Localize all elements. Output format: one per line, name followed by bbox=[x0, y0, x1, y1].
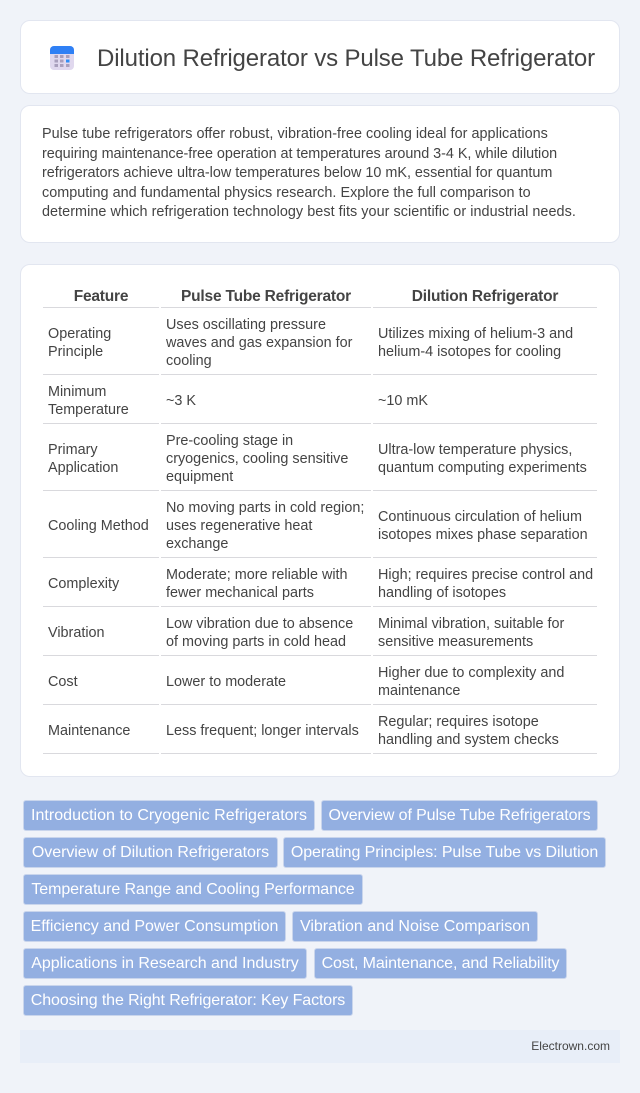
row: vibration: Low vibration due to absence bbox=[166, 616, 353, 632]
row: cooling method bbox=[48, 500, 588, 552]
row: minimum temperature bbox=[48, 384, 428, 418]
topic tags: Choosing the Right Refrigerator: Key Factors bbox=[31, 992, 345, 1009]
row: cost: maintenance bbox=[378, 683, 460, 699]
topic tags: Overview of Pulse Tube Refrigerators bbox=[329, 807, 590, 824]
row: complexity: handling of isotopes bbox=[378, 585, 506, 601]
topic tags: Applications in Research and Industry bbox=[31, 955, 299, 972]
row: primary application bbox=[48, 433, 587, 485]
topic tags: Cost, Maintenance, and Reliability bbox=[322, 955, 559, 972]
row: maintenance bbox=[48, 714, 559, 748]
row: maintenance: handling and system checks bbox=[378, 732, 559, 748]
row: operating principle: helium-4 isotopes for cooling bbox=[378, 344, 561, 360]
footer: Electrown.com bbox=[531, 1039, 610, 1053]
table header: Pulse Tube Refrigerator bbox=[181, 288, 351, 305]
row: operating principle: Principle bbox=[48, 344, 103, 360]
row: complexity bbox=[48, 567, 593, 601]
row: cost bbox=[48, 665, 564, 699]
row: operating principle: Operating bbox=[48, 326, 111, 342]
row: cooling method: uses regenerative heat bbox=[166, 518, 312, 534]
row: operating principle bbox=[48, 317, 573, 369]
row: operating principle: waves and gas expansion for bbox=[166, 335, 352, 351]
row: operating principle: Uses oscillating pressure bbox=[166, 317, 326, 333]
row: minimum temperature: Minimum bbox=[48, 384, 106, 400]
table header: Dilution Refrigerator bbox=[412, 288, 558, 305]
row: vibration: sensitive measurements bbox=[378, 634, 533, 650]
topic tags bbox=[23, 800, 606, 1016]
row: cooling method: isotopes mixes phase separation bbox=[378, 527, 588, 543]
row: primary application: cryogenics, cooling sensitive bbox=[166, 451, 348, 467]
row: maintenance: Less frequent; longer intervals bbox=[166, 723, 359, 739]
row: cooling method: No moving parts in cold region; bbox=[166, 500, 364, 516]
row: minimum temperature: Temperature bbox=[48, 402, 129, 418]
row: complexity: Complexity bbox=[48, 576, 119, 592]
row: cost: Lower to moderate bbox=[166, 674, 286, 690]
topic tags: Operating Principles: Pulse Tube vs Dilution bbox=[291, 844, 598, 861]
title: Dilution Refrigerator vs Pulse Tube Refrigerator bbox=[97, 45, 595, 72]
row: minimum temperature: ~10 mK bbox=[378, 393, 428, 409]
row: vibration: Minimal vibration, suitable for bbox=[378, 616, 564, 632]
topic tags: Vibration and Noise Comparison bbox=[300, 918, 530, 935]
intro text: refrigerators achieve ultra-low temperatures below 10 mK, essential for quantum bbox=[42, 165, 552, 181]
row: vibration: Vibration bbox=[48, 625, 105, 641]
table header: Feature bbox=[74, 288, 128, 305]
row: maintenance: Maintenance bbox=[48, 723, 130, 739]
intro text: Pulse tube refrigerators offer robust, vibration-free cooling ideal for applications bbox=[42, 126, 548, 142]
row: primary application: Ultra-low temperature physics, bbox=[378, 442, 572, 458]
footer bbox=[20, 1030, 620, 1063]
intro text bbox=[42, 126, 576, 220]
row: operating principle: Utilizes mixing of helium-3 and bbox=[378, 326, 573, 342]
topic tags: Efficiency and Power Consumption bbox=[31, 918, 278, 935]
row: complexity: fewer mechanical parts bbox=[166, 585, 314, 601]
row: cooling method: Cooling Method bbox=[48, 518, 149, 534]
row: cost: Cost bbox=[48, 674, 78, 690]
row: operating principle: cooling bbox=[166, 353, 212, 369]
row: cooling method: exchange bbox=[166, 536, 228, 552]
intro text: computing and fundamental physics research. Explore the full comparison to bbox=[42, 185, 531, 201]
row: vibration bbox=[48, 616, 564, 650]
row: maintenance: Regular; requires isotope bbox=[378, 714, 539, 730]
topic tags: Overview of Dilution Refrigerators bbox=[32, 844, 269, 861]
row: cost: Higher due to complexity and bbox=[378, 665, 564, 681]
row: primary application: equipment bbox=[166, 469, 233, 485]
row: complexity: Moderate; more reliable with bbox=[166, 567, 348, 583]
intro card bbox=[20, 105, 620, 243]
intro text: determine which refrigeration technology best fits your scientific or industrial needs. bbox=[42, 204, 576, 220]
topic tags: Temperature Range and Cooling Performance bbox=[31, 881, 355, 898]
icon: calendar bbox=[50, 46, 74, 70]
row: primary application: quantum computing experiments bbox=[378, 460, 587, 476]
header card bbox=[20, 20, 620, 94]
row: primary application: Application bbox=[48, 460, 118, 476]
row: complexity: High; requires precise control and bbox=[378, 567, 593, 583]
row: vibration: of moving parts in cold head bbox=[166, 634, 346, 650]
topic tags: Introduction to Cryogenic Refrigerators bbox=[31, 807, 307, 824]
row: primary application: Pre-cooling stage in bbox=[166, 433, 293, 449]
row: minimum temperature: ~3 K bbox=[166, 393, 196, 409]
table card bbox=[20, 264, 620, 777]
table header bbox=[74, 288, 558, 305]
intro text: requiring maintenance-free operation at temperatures around 3-4 K, while dilution bbox=[42, 146, 557, 162]
row: cooling method: Continuous circulation of helium bbox=[378, 509, 582, 525]
row: primary application: Primary bbox=[48, 442, 98, 458]
